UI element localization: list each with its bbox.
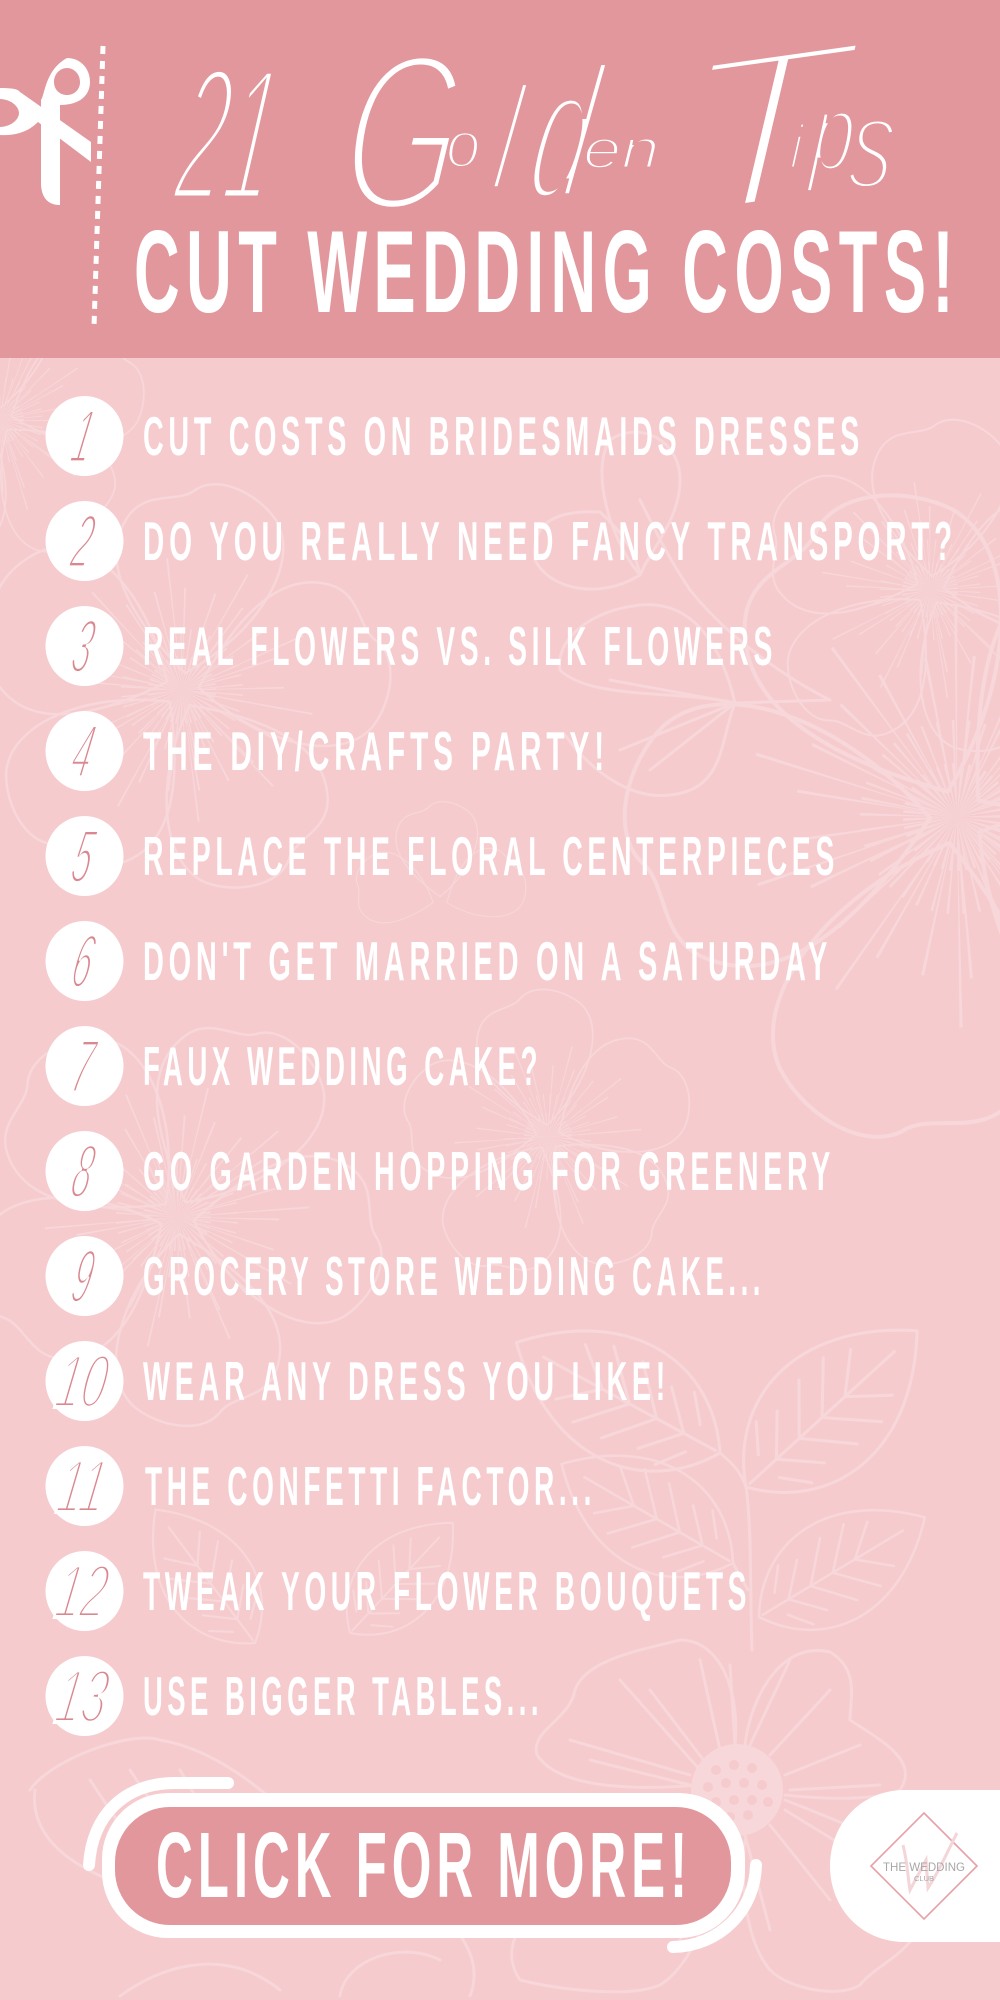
tip 5	[46, 814, 839, 898]
list of tips	[46, 394, 957, 1739]
icon: scissors	[0, 58, 91, 205]
tip 6: 6	[65, 919, 102, 1003]
tip 12: 12	[50, 1550, 115, 1634]
tip 4	[46, 709, 609, 793]
title: script line: T	[677, 0, 866, 267]
tip 1	[46, 394, 864, 478]
tip 7: 7	[65, 1024, 103, 1108]
tip 6	[46, 919, 832, 1003]
tip 7: FAUX WEDDING CAKE?	[143, 1035, 542, 1097]
outer arc top-left	[89, 1783, 228, 1865]
tip 2	[46, 499, 957, 583]
list of tips: USE BIGGER TABLES...	[143, 1665, 543, 1727]
logo subtext: CLUB	[914, 1874, 934, 1883]
tip 2: 2	[65, 499, 102, 583]
title: script line: s	[844, 70, 902, 216]
tip 10	[46, 1340, 670, 1424]
button outline	[102, 1793, 745, 1938]
tip 8	[46, 1129, 835, 1213]
bottom flower petals	[536, 1640, 736, 1787]
call to action button	[89, 1783, 756, 1947]
logo badge	[830, 1790, 1000, 1942]
title: script line: en	[583, 119, 659, 180]
bottom flower centre	[691, 1744, 783, 1836]
tip 1: 1	[65, 394, 102, 478]
tip 13: 13	[50, 1655, 115, 1739]
title: script line: 21	[166, 30, 291, 241]
header band	[0, 0, 1000, 358]
title: script line: l	[484, 54, 534, 222]
title: script line: p	[805, 72, 861, 194]
tip 13	[46, 1655, 543, 1739]
tip 3	[46, 604, 777, 688]
tip 8: 8	[65, 1129, 102, 1213]
outer arc bottom-right	[673, 1865, 756, 1947]
title: script line: i	[789, 113, 806, 182]
bottom left flower petals	[30, 1738, 320, 1880]
tip 5: 5	[65, 814, 103, 898]
script W	[903, 1833, 957, 1890]
tip 9	[46, 1234, 765, 1318]
button fill	[115, 1807, 731, 1925]
title: script line	[166, 0, 902, 267]
logo text: THE WEDDING	[883, 1860, 965, 1874]
title: script line: d	[517, 27, 615, 238]
tip 10: 10	[50, 1340, 115, 1424]
diamond mark	[871, 1813, 977, 1919]
tip 12	[46, 1550, 751, 1634]
title: script line: o	[446, 110, 480, 181]
dashed cut line	[94, 46, 103, 327]
tip 4: THE DIY/CRAFTS PARTY!	[143, 720, 609, 782]
tip 11	[46, 1445, 596, 1529]
tip 11: 11	[52, 1445, 113, 1529]
tip 7	[46, 1024, 542, 1108]
tip 4: 4	[65, 709, 102, 793]
tip 9: 9	[65, 1234, 102, 1318]
tip 3: 3	[65, 604, 102, 688]
title: script line: G	[333, 7, 475, 258]
